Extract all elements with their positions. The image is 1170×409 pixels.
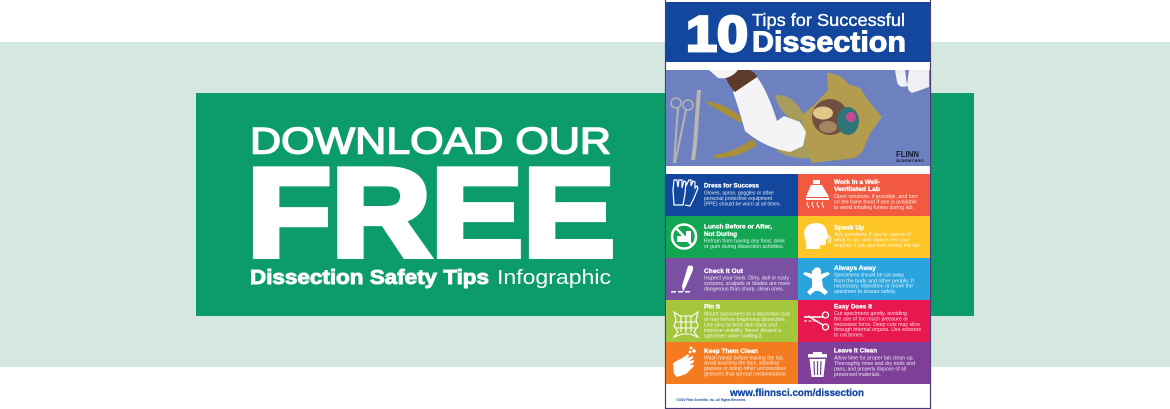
icon: scissors	[804, 312, 828, 330]
tip: lunch before or after: Not During	[704, 231, 737, 238]
tip: leave it clean: Leave it Clean	[834, 348, 877, 355]
poster header	[666, 2, 930, 62]
tip: easy does it: Easy Does It	[834, 304, 873, 310]
header background	[666, 2, 930, 62]
tip: always away: necessary, reposition or move the	[834, 284, 913, 290]
tip: always away: Always Away	[834, 265, 876, 272]
tip: check it out: Inspect your tools. Dirty, dull or rusty	[704, 276, 789, 282]
tip: dress for success	[666, 174, 798, 216]
frog body	[801, 73, 882, 163]
icon: speaking head	[804, 223, 831, 249]
tip: leave it clean: Allow time for proper lab clean up.	[834, 356, 914, 362]
tip: dress for success: (PPE) should be worn at all times.	[704, 202, 781, 208]
header line one: Tips for Successful	[752, 10, 905, 30]
tip: speak up: what to do, and always tell your	[834, 238, 910, 244]
photo background	[666, 70, 930, 166]
tip: pin it: or tray before beginning dissection.	[704, 317, 786, 323]
poster sheet	[666, 0, 930, 408]
tip: leave it clean	[798, 342, 930, 384]
frog legs	[705, 101, 757, 158]
tip: check it out: scissors, scalpels or blades are more	[704, 281, 790, 287]
tip: check it out: dangerous than sharp, clean ones.	[704, 286, 784, 292]
download our text: DOWNLOAD OUR	[250, 120, 611, 162]
tip: keep them clean	[666, 342, 798, 384]
tip: easy does it	[798, 300, 930, 342]
website url: www.flinnsci.com/dissection	[729, 387, 864, 399]
tip: work in a well-ventilated lab: Ventilated Lab	[834, 186, 880, 193]
tip: always away: from the body and other people. If	[834, 278, 915, 284]
tip: easy does it: excessive force. Deep cuts may slice	[834, 322, 920, 328]
icon: scalpel	[671, 266, 693, 292]
tagline light: Infographic	[497, 267, 611, 289]
second glove	[895, 70, 929, 93]
icon: trash can	[808, 352, 827, 377]
tip: lunch before or after: Lunch Before or After,	[704, 224, 772, 231]
tip: keep them clean: Keep Them Clean	[704, 348, 758, 355]
flinn scientific logo: SCIENTIFIC	[896, 159, 925, 163]
tip: work in a well-ventilated lab: Open windows, if possible, and turn	[834, 194, 918, 200]
tip: pin it: Mount specimens to a dissection pad	[704, 312, 790, 318]
tip: lunch before or after	[666, 216, 798, 258]
tip: easy does it: Cut specimens gently, avoiding	[834, 311, 907, 317]
white glove	[733, 77, 806, 152]
tip: leave it clean: Thoroughly rinse and dry tools and	[834, 361, 915, 367]
background band	[0, 42, 1170, 367]
tip: dress for success: Dress for Success	[704, 182, 759, 189]
tip: work in a well-ventilated lab: on the fume hood if one is available	[834, 200, 917, 206]
banner headline	[247, 120, 615, 289]
tip: check it out	[666, 258, 798, 300]
icon: washing hands	[673, 347, 696, 377]
tagline bold: Dissection Safety Tips	[250, 267, 489, 289]
green banner	[196, 93, 974, 316]
flinn scientific logo	[896, 150, 925, 163]
tip: keep them clean: Wash hands before leaving the lab.	[704, 356, 784, 362]
free text: FREE	[247, 142, 615, 283]
poster	[666, 0, 930, 408]
tip: pin it: Use pins to hold skin back and	[704, 322, 777, 328]
tip: pin it: Pin It	[704, 304, 721, 310]
tip: pin it	[666, 300, 798, 342]
copyright: ©2020 Flinn Scientific, Inc. All Rights Reserved.	[676, 398, 746, 402]
tip: dress for success: personal protective equipment	[704, 196, 773, 202]
tip: check it out: Check it Out	[704, 268, 744, 275]
tip: keep them clean: gestures that spread contamination.	[704, 372, 787, 378]
tip: easy does it: the use of too much pressure or	[834, 316, 908, 322]
frog organs	[812, 99, 859, 135]
frog thighs	[775, 95, 815, 158]
tip: pin it: specimen while holding it.	[704, 334, 763, 340]
tip: always away: specimen to ensure safety.	[834, 289, 896, 295]
tip: keep them clean: Avoid touching the face, adjusting	[704, 360, 779, 366]
scalpel	[691, 90, 701, 160]
tip: lunch before or after: or gum during dissection activities.	[704, 244, 784, 250]
tip: work in a well-ventilated lab	[798, 174, 930, 216]
tip: pin it: improve visibility. Never dissect a	[704, 328, 781, 334]
icon: frog specimen	[803, 267, 830, 295]
icon: pinned frog	[674, 312, 698, 337]
header line two: Dissection	[752, 26, 906, 58]
tip: leave it clean: preserved materials.	[834, 372, 881, 378]
tip: always away: Specimens should be cut away	[834, 272, 904, 278]
tip: keep them clean: glasses or doing other unconscious	[704, 366, 786, 372]
big number 10: 10	[686, 6, 748, 62]
tip: easy does it: through internal organs. Use scissors	[834, 327, 921, 333]
tip: easy does it: to cut bones.	[834, 332, 864, 338]
scissors	[671, 98, 693, 163]
icon: no food	[672, 224, 696, 248]
tip: speak up	[798, 216, 930, 258]
tip: speak up: teacher if you get hurt during the lab.	[834, 243, 921, 249]
tip: speak up: Ask questions if you're unsure of	[834, 232, 912, 238]
icon: gloves	[673, 180, 698, 206]
arm	[723, 70, 757, 92]
tip: lunch before or after: Refrain from having any food, drink	[704, 239, 785, 245]
tip: speak up: Speak Up	[834, 224, 864, 231]
tip: always away	[798, 258, 930, 300]
tip: leave it clean: pans, and properly dispose of all	[834, 366, 906, 372]
tip: work in a well-ventilated lab: Work in a Well-	[834, 179, 880, 186]
photo of frog dissection	[666, 70, 930, 166]
tip: dress for success: Gloves, apron, goggles or other	[704, 190, 774, 196]
flinn scientific logo: FLINN	[896, 150, 919, 159]
tip: work in a well-ventilated lab: to avoid inhaling fumes during lab.	[834, 205, 914, 211]
upper cuff	[709, 70, 738, 78]
icon: fume hood	[806, 180, 829, 208]
